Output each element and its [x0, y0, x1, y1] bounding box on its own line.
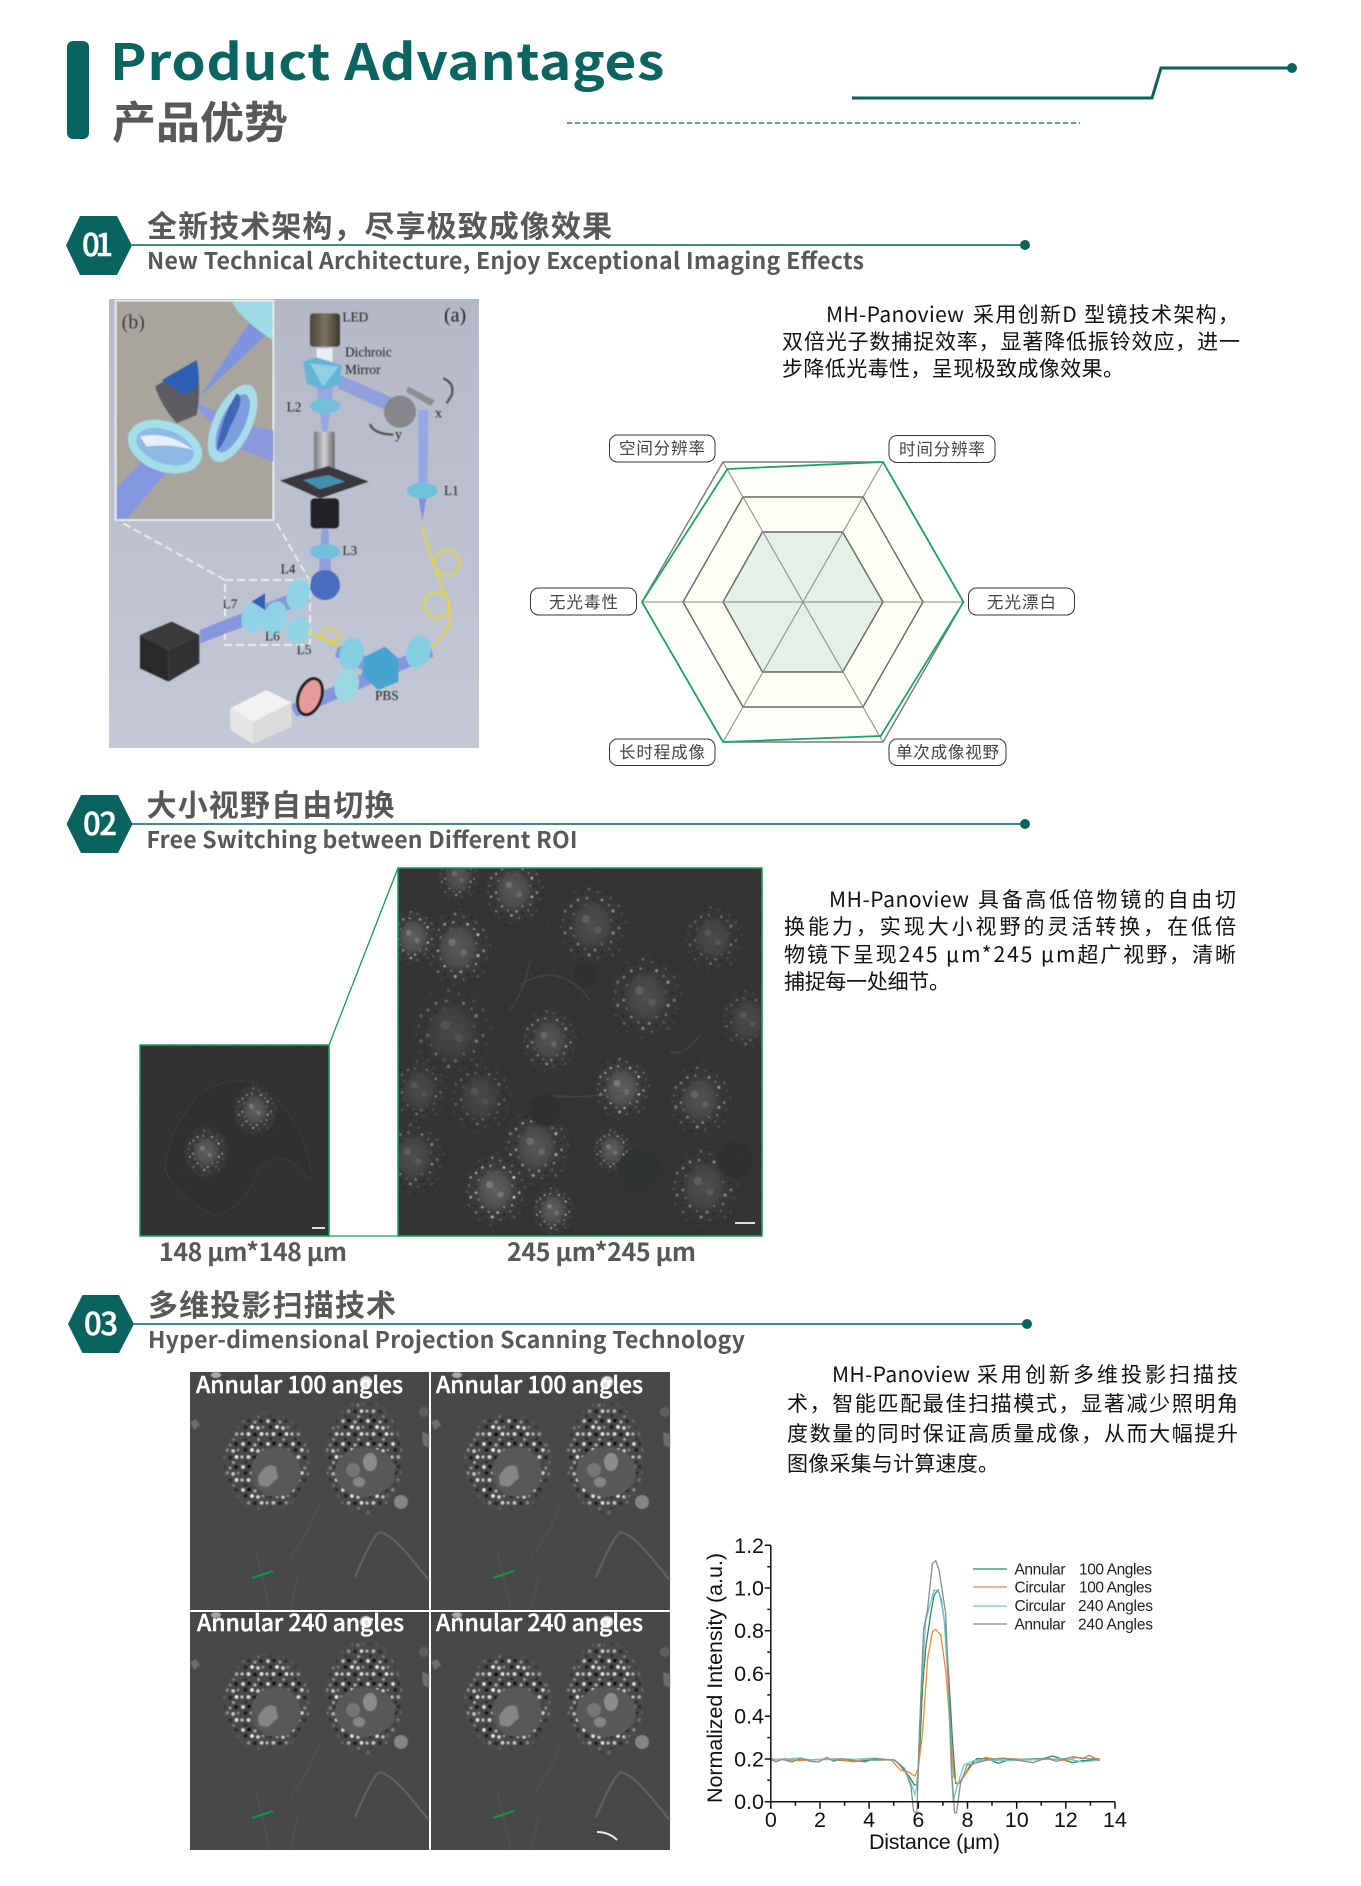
- inset (b) lens detail: [116, 301, 273, 520]
- chart legend: Circular: [1014, 1580, 1066, 1596]
- page title block: [67, 23, 664, 151]
- x-axis tick labels: 8: [962, 1808, 974, 1832]
- radar data polygon: [642, 462, 964, 742]
- hexagon badge 01: 01: [82, 220, 113, 265]
- description paragraph 01: [782, 299, 1240, 383]
- radar label: 时间分辨率: 时间分辨率: [899, 436, 985, 460]
- x-axis tick labels: 12: [1054, 1808, 1078, 1832]
- hexagon badge 01: [66, 216, 132, 275]
- description paragraph 02: 捕捉每一处细节。: [784, 966, 950, 996]
- chart legend: 100 Angles: [1079, 1580, 1152, 1596]
- y-axis tick labels: 0.0: [734, 1790, 764, 1814]
- inset (b) lens detail: (b): [122, 311, 145, 333]
- description paragraph 03: 术，智能匹配最佳扫描模式，显著减少照明角: [787, 1388, 1238, 1418]
- upper beam path and LED: Dichroic: [345, 345, 392, 360]
- description paragraph 01: MH-Panoview: [826, 299, 964, 329]
- y-axis tick labels: 0.2: [734, 1748, 764, 1772]
- zoom connector lines: [329, 868, 398, 1236]
- heading English: New Technical Architecture, Enjoy Exceptional Imaging Effects: [147, 242, 864, 276]
- heading rule: [134, 1319, 1032, 1329]
- micrograph: Annular 100 angles (right): Annular 100 angles: [436, 1366, 643, 1400]
- title: 产品优势: 产品优势: [112, 87, 288, 151]
- objective and stage: L3: [342, 543, 357, 558]
- y-axis tick labels: [734, 1534, 764, 1814]
- heading rule: [132, 240, 1030, 250]
- chart legend: 240 Angles: [1078, 1616, 1153, 1634]
- upper beam path and LED: LED: [342, 310, 369, 325]
- x-axis tick labels: 6: [912, 1808, 924, 1832]
- y-axis title: Normalized Intensity (a.u.): [703, 1553, 727, 1803]
- radar chart: [530, 435, 1074, 766]
- upper beam path and LED: [287, 310, 459, 520]
- upper beam path and LED: x: [435, 406, 442, 421]
- detection path lenses and camera: L5: [297, 642, 312, 657]
- description paragraph 02: [784, 884, 1236, 996]
- y-axis tick labels: 0.4: [734, 1705, 764, 1729]
- micrograph: Annular 240 angles (right): [431, 1604, 670, 1850]
- description paragraph 03: 度数量的同时保证高质量成像，从而大幅提升: [787, 1418, 1238, 1448]
- chart axes and ticks: [765, 1545, 1115, 1809]
- title accent bar: [67, 41, 89, 139]
- upper beam path and LED: Mirror: [345, 362, 381, 377]
- y-axis tick labels: 1.0: [734, 1576, 764, 1600]
- chart curves: [771, 1561, 1100, 1813]
- detection path lenses and camera: L4: [281, 561, 296, 576]
- description paragraph 01: 采用创新D 型镜技术架构，: [973, 299, 1239, 329]
- detection path lenses and camera: L6: [265, 629, 280, 644]
- radar label: 空间分辨率: 空间分辨率: [619, 435, 705, 459]
- y-axis tick labels: 0.8: [734, 1619, 764, 1643]
- excitation path and laser: [230, 632, 434, 744]
- objective and stage: [280, 432, 369, 600]
- description paragraph 01: 双倍光子数捕捉效率，显著降低振铃效应，进一: [782, 326, 1240, 356]
- excitation path and laser: PBS: [375, 688, 399, 703]
- radar label: 无光漂白: [968, 588, 1074, 615]
- micrograph: Annular 100 angles (right): [431, 1366, 670, 1610]
- micrograph: Annular 100 angles (left): Annular 100 angles: [196, 1366, 403, 1400]
- dashed zoom box: [123, 523, 310, 645]
- x-axis tick labels: 14: [1103, 1808, 1127, 1832]
- label (a): (a): [444, 305, 466, 327]
- optical setup illustration: [109, 299, 479, 748]
- yellow optical fibre: [307, 525, 459, 647]
- description paragraph 01: 步降低光毒性，呈现极致成像效果。: [782, 353, 1124, 383]
- chart legend: 240 Angles: [1078, 1598, 1153, 1615]
- heading rule: [132, 819, 1030, 829]
- x-axis tick labels: 10: [1005, 1808, 1029, 1832]
- chart legend: Circular: [1014, 1598, 1066, 1615]
- radar rings: [642, 462, 964, 742]
- chart legend: [973, 1562, 1153, 1634]
- small field-of-view micrograph: [140, 1045, 329, 1236]
- x-axis tick labels: [765, 1808, 1127, 1832]
- upper beam path and LED: L1: [444, 483, 459, 498]
- micrograph: Annular 100 angles (left): [190, 1366, 429, 1610]
- hexagon badge 03: 03: [84, 1299, 118, 1344]
- x-axis tick labels: 4: [863, 1808, 875, 1832]
- caption: 148 µm: 148 μm*148 μm: [159, 1233, 347, 1269]
- description paragraph 02: MH-Panoview: [829, 884, 969, 914]
- decorative step connector: [567, 63, 1297, 123]
- description paragraph 02: 具备高低倍物镜的自由切: [978, 884, 1236, 914]
- section 03 heading: [68, 1281, 1032, 1355]
- heading Chinese: 大小视野自由切换: [146, 781, 394, 825]
- caption: 245 µm: 245 μm*245 μm: [507, 1233, 696, 1269]
- description paragraph 02: 物镜下呈现245 μm*245 μm超广视野，清晰: [784, 939, 1236, 969]
- upper beam path and LED: y: [395, 427, 402, 442]
- y-axis tick labels: 0.6: [734, 1662, 764, 1686]
- micrograph: Annular 240 angles (left): Annular 240 angles: [197, 1604, 404, 1638]
- description paragraph 03: 采用创新多维投影扫描技: [977, 1359, 1238, 1389]
- detection path lenses and camera: [140, 561, 314, 682]
- title: Product Advantages: Product Advantages: [110, 23, 664, 95]
- line chart: normalized intensity: [703, 1534, 1153, 1854]
- section 02 heading: [66, 781, 1030, 855]
- section 01 heading: [66, 202, 1030, 276]
- radar label: 长时程成像: 长时程成像: [619, 739, 705, 763]
- radar label: 无光毒性: [530, 588, 636, 615]
- heading English: Free Switching between Different ROI: [146, 821, 578, 855]
- description paragraph 03: [787, 1359, 1238, 1478]
- description paragraph 03: MH-Panoview: [832, 1359, 970, 1389]
- large field-of-view micrograph: [397, 867, 763, 1237]
- radar label: 无光漂白: 无光漂白: [987, 589, 1056, 613]
- hexagon badge 02: 02: [83, 799, 117, 844]
- description paragraph 02: 换能力，实现大小视野的灵活转换，在低倍: [784, 911, 1236, 941]
- heading Chinese: 全新技术架构，尽享极致成像效果: [147, 202, 612, 246]
- radar label: 单次成像视野: 单次成像视野: [896, 739, 999, 763]
- hexagon badge 02: [66, 795, 132, 853]
- chart legend: Annular: [1014, 1616, 1066, 1634]
- detection path lenses and camera: L7: [223, 596, 238, 611]
- chart legend: Annular: [1014, 1562, 1066, 1578]
- micrograph: Annular 240 angles (right): Annular 240 angles: [436, 1604, 643, 1638]
- y-axis tick labels: 1.2: [734, 1534, 764, 1558]
- x-axis tick labels: 0: [765, 1808, 777, 1832]
- x-axis title: Distance (μm): [869, 1830, 1000, 1854]
- hexagon badge 03: [68, 1295, 134, 1353]
- x-axis tick labels: 2: [814, 1808, 826, 1832]
- radar label: 无光毒性: 无光毒性: [549, 589, 618, 613]
- micrograph: Annular 240 angles (left): [190, 1604, 429, 1850]
- chart legend: 100 Angles: [1079, 1562, 1152, 1578]
- upper beam path and LED: L2: [287, 400, 301, 415]
- description paragraph 03: 图像采集与计算速度。: [787, 1448, 999, 1478]
- heading Chinese: 多维投影扫描技术: [148, 1281, 396, 1325]
- heading English: Hyper-dimensional Projection Scanning Technology: [148, 1321, 745, 1355]
